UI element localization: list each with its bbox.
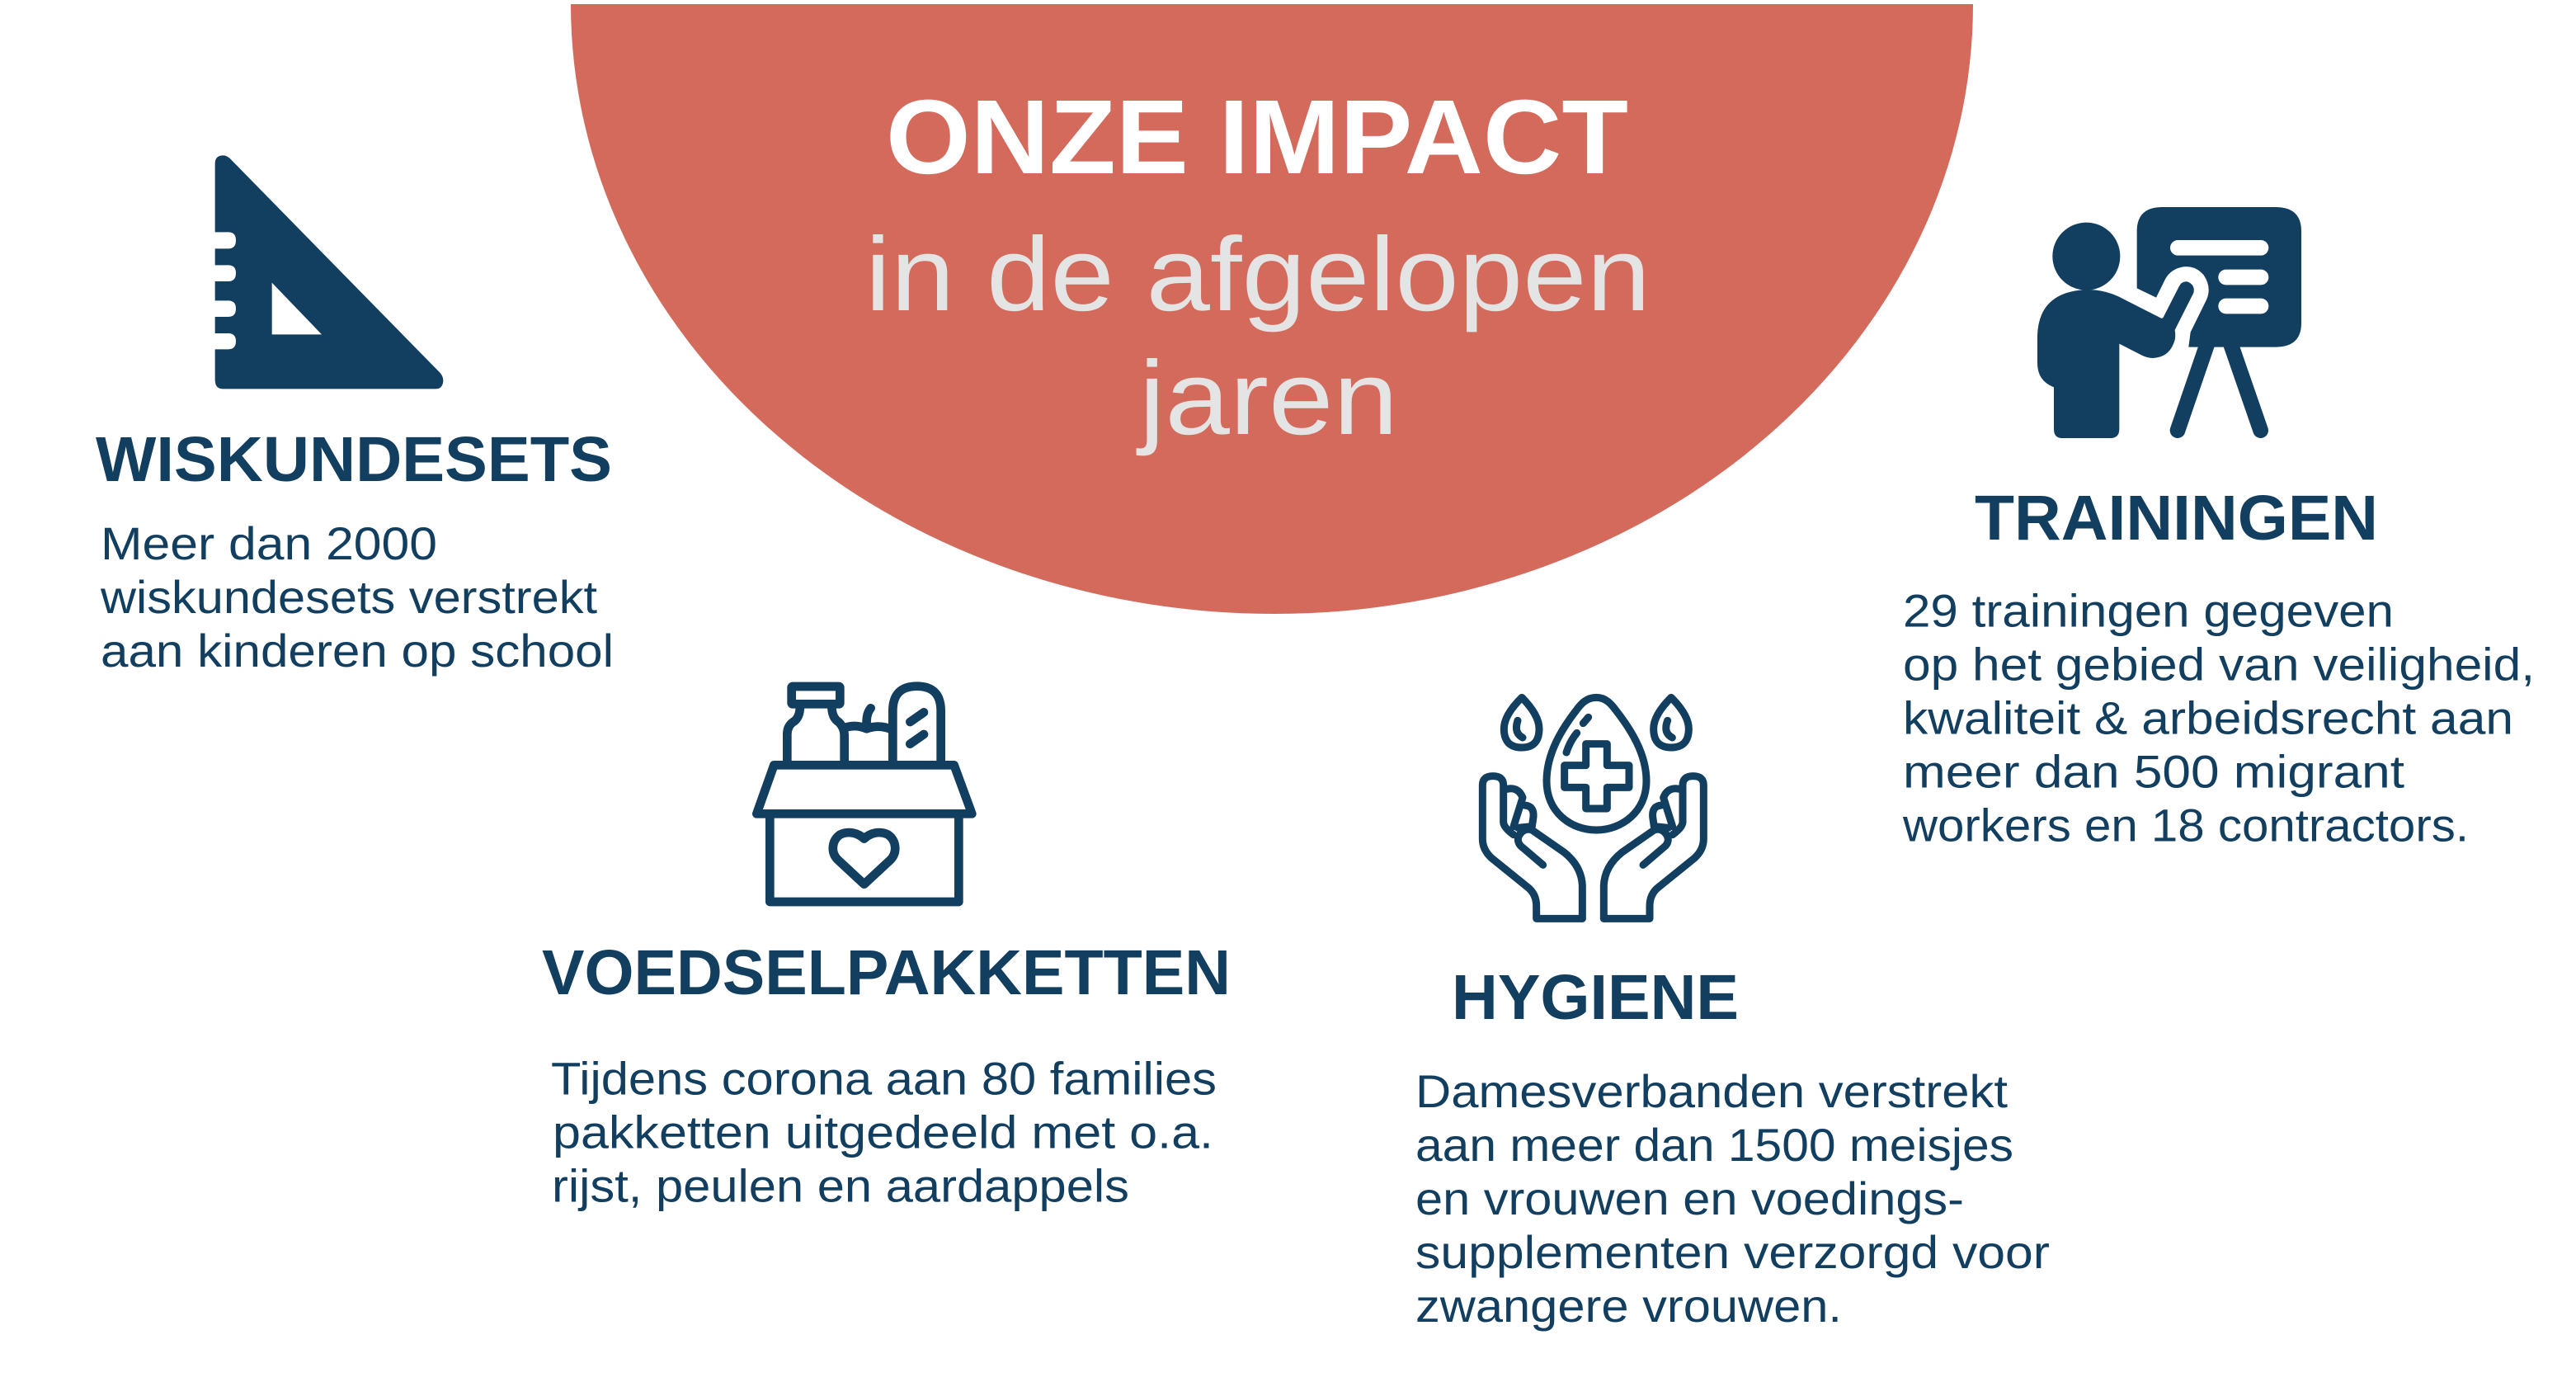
- text block: trainingen description: [1902, 584, 2535, 851]
- heading: WISKUNDESETS: WISKUNDESETS: [96, 424, 612, 495]
- text block: voedselpakketten description: [551, 1053, 1217, 1211]
- text block: hygiene description: supplementen verzorgd voor: [1415, 1226, 2050, 1278]
- title: ONZE IMPACT: ONZE IMPACT: [886, 78, 1628, 196]
- text block: voedselpakketten description: pakketten uitgedeeld met o.a.: [553, 1106, 1213, 1158]
- text block: wiskundesets description: aan kinderen op school: [101, 625, 614, 677]
- subtitle line: jaren: jaren: [1136, 339, 1398, 456]
- text block: wiskundesets description: wiskundesets verstrekt: [100, 571, 597, 623]
- text block: hygiene description: [1415, 1065, 2050, 1332]
- text block: hygiene description: en vrouwen en voedings-: [1415, 1172, 1964, 1224]
- text block: trainingen description: meer dan 500 migrant: [1903, 746, 2404, 797]
- text block: hygiene description: aan meer dan 1500 meisjes: [1415, 1119, 2013, 1171]
- text block: wiskundesets description: Meer dan 2000: [101, 517, 437, 569]
- text block: wiskundesets description: [100, 517, 614, 677]
- icon: food parcel box: [756, 686, 972, 902]
- text block: trainingen description: 29 trainingen gegeven: [1903, 584, 2394, 637]
- text block: trainingen description: workers en 18 contractors.: [1902, 799, 2469, 851]
- icon: hands with drops and cross: [1482, 697, 1703, 918]
- text block: trainingen description: op het gebied van veiligheid,: [1903, 639, 2535, 690]
- subtitle line: in de afgelopen: in de afgelopen: [865, 215, 1651, 333]
- heading: VOEDSELPAKKETTEN: VOEDSELPAKKETTEN: [542, 937, 1231, 1008]
- text block: voedselpakketten description: Tijdens corona aan 80 families: [551, 1053, 1217, 1104]
- text block: trainingen description: kwaliteit & arbeidsrecht aan: [1903, 691, 2513, 744]
- text block: hygiene description: Damesverbanden verstrekt: [1415, 1065, 2008, 1117]
- text block: voedselpakketten description: rijst, peulen en aardappels: [552, 1160, 1129, 1211]
- text block: hygiene description: zwangere vrouwen.: [1415, 1280, 1842, 1332]
- panel: title half-ellipse: [571, 4, 1973, 614]
- icon: set square: [215, 155, 443, 389]
- heading: HYGIENE: HYGIENE: [1452, 962, 1739, 1033]
- icon: trainer at board: [2037, 207, 2301, 438]
- heading: TRAININGEN: TRAININGEN: [1975, 483, 2378, 554]
